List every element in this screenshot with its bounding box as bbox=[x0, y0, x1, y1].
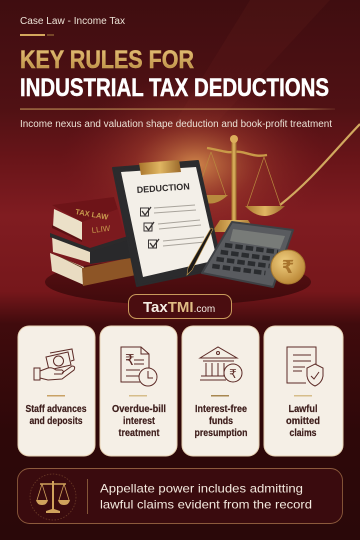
icon: document with shield bbox=[287, 347, 323, 386]
panel: interest-free funds bbox=[182, 326, 259, 456]
icon: bill with clock: ₹ bbox=[125, 351, 135, 369]
card label: omitted bbox=[286, 416, 320, 427]
callout text bbox=[100, 482, 312, 512]
card label bbox=[194, 404, 248, 439]
icon: hand with cash bbox=[34, 349, 75, 380]
card label bbox=[26, 404, 87, 427]
card label bbox=[112, 404, 166, 439]
card label: Overdue-bill bbox=[112, 404, 166, 415]
title bbox=[20, 46, 329, 102]
book: middle bbox=[50, 233, 131, 264]
icon: rupee coin bbox=[271, 250, 305, 284]
book label: llw: LLIW bbox=[91, 224, 111, 235]
clipboard heading: DEDUCTION bbox=[136, 181, 190, 195]
book label: tax law: TAX LAW bbox=[75, 207, 110, 222]
card accent bbox=[211, 395, 229, 396]
logo badge: TaxTMI.com bbox=[143, 299, 215, 316]
panel: appellate callout bbox=[18, 468, 342, 524]
icon: rupee coin: ₹ bbox=[282, 257, 294, 278]
card label: Interest-free bbox=[195, 404, 247, 415]
panel: overdue-bill interest bbox=[100, 326, 177, 456]
icon: scales of justice bbox=[193, 135, 285, 232]
book: top bbox=[52, 197, 125, 242]
callout text: Appellate power includes admitting bbox=[100, 482, 303, 496]
clipboard bbox=[113, 160, 222, 286]
card label bbox=[286, 404, 320, 439]
book: bottom bbox=[50, 252, 136, 286]
callout text: lawful claims evident from the record bbox=[100, 498, 312, 512]
card label: funds bbox=[209, 416, 233, 427]
card label: interest bbox=[123, 416, 156, 427]
card label: claims bbox=[290, 428, 317, 439]
books bbox=[50, 197, 136, 286]
card label: Lawful bbox=[288, 404, 318, 415]
panel: lawful omitted claims bbox=[264, 326, 343, 456]
divider bbox=[86, 479, 89, 514]
card accent bbox=[129, 395, 147, 396]
clip bbox=[139, 160, 181, 175]
card label: treatment bbox=[118, 428, 160, 439]
platform bbox=[45, 259, 311, 305]
subtitle: Income nexus and valuation shape deduction and book-profit treatment bbox=[20, 119, 332, 130]
title: KEY RULES FOR bbox=[20, 46, 194, 74]
card label: presumption bbox=[194, 428, 248, 439]
pen bbox=[187, 228, 213, 275]
title divider bbox=[20, 108, 335, 110]
logo badge bbox=[128, 294, 232, 318]
accent rule bbox=[20, 34, 54, 36]
card label: and deposits bbox=[30, 416, 83, 427]
icon: bank with rupee: ₹ bbox=[229, 367, 237, 381]
gold swoosh bbox=[280, 124, 360, 205]
checklist bbox=[140, 205, 205, 248]
eyebrow label: Case Law - Income Tax bbox=[20, 16, 125, 27]
card accent bbox=[294, 395, 312, 396]
card accent bbox=[47, 395, 65, 396]
panel: staff advances bbox=[18, 326, 95, 456]
calculator bbox=[202, 222, 293, 287]
icon: gold scales bbox=[30, 474, 76, 520]
card label: Staff advances bbox=[26, 404, 87, 415]
